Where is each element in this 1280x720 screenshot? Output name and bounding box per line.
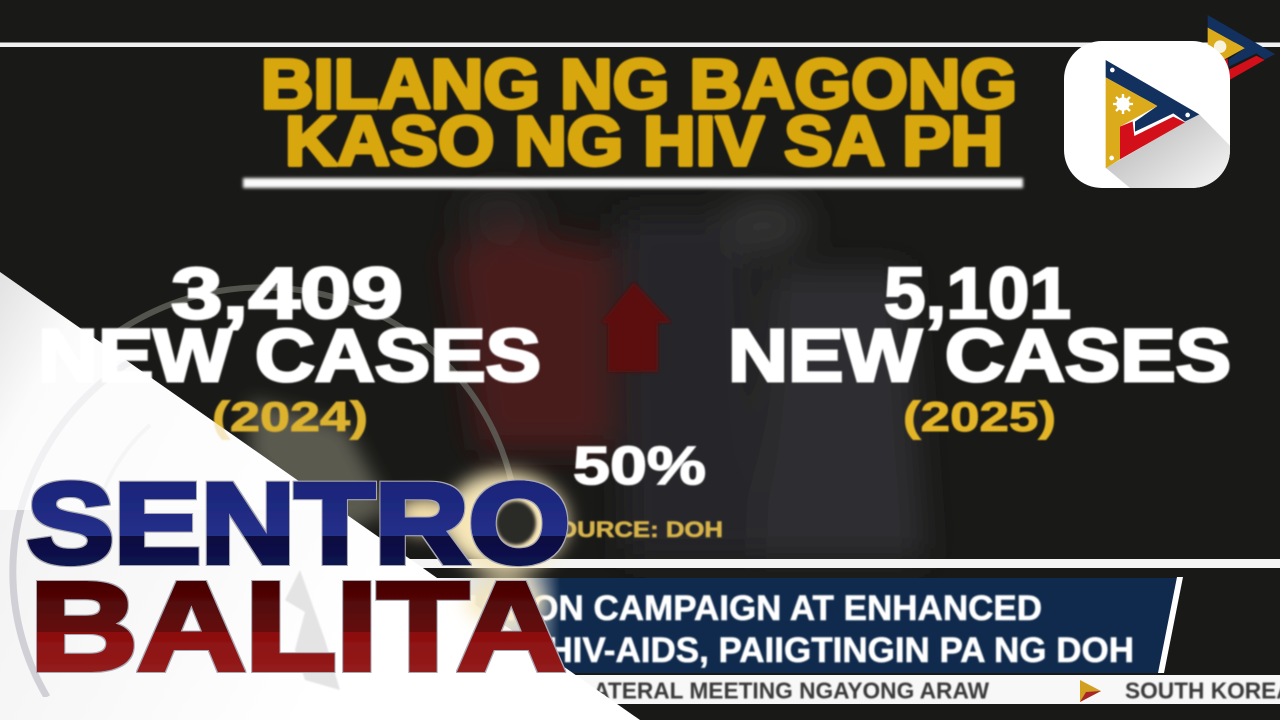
sentro balita white wedge (0, 272, 640, 720)
up arrow (601, 282, 672, 372)
left stat: 2024 new cases: NEW CASES (38, 314, 541, 397)
title: KASO NG HIV SA PH (285, 102, 1003, 180)
logo stars (1109, 68, 1190, 160)
left stat: 2024 new cases: 3,409 (171, 254, 403, 334)
sentro balita logo (27, 460, 570, 696)
right stat: 2025 new cases: NEW CASES (728, 314, 1231, 397)
headline text (330, 589, 1134, 670)
wedge globe arc (9, 362, 132, 697)
balita wordmark: BALITA (30, 558, 565, 696)
logo red chevron (1120, 117, 1185, 159)
wedge inner arc (100, 425, 150, 500)
wedge translucent veil (0, 272, 340, 510)
right stat: 2025 new cases: (2025) (903, 393, 1056, 440)
left stat: 2024 new cases: (2024) (212, 393, 368, 440)
logo sun (1113, 94, 1133, 114)
news ticker (364, 675, 1280, 704)
source: SOURCE: DOH (540, 517, 723, 542)
ticker text: PAGDARAOS NG BILATERAL MEETING NGAYONG ARAW (364, 678, 990, 704)
sentro wordmark: SENTRO (27, 460, 570, 588)
logo drop shadow (1106, 114, 1240, 188)
counter of the O (496, 501, 536, 545)
icon: small corner logo (1208, 15, 1275, 93)
background globe (100, 287, 515, 540)
logo blue chevron (1106, 60, 1199, 132)
percent increase: 50% (573, 436, 706, 496)
icon: ticker play arrow (1080, 680, 1101, 702)
headline text: TESTING VS HIV-AIDS, PAIIGTINGIN PA NG DOH (330, 631, 1134, 670)
title (261, 45, 1017, 180)
title underline (243, 178, 1023, 188)
logo glow (395, 472, 567, 626)
icon: main app logo (1064, 41, 1240, 188)
headline text: INFORMATION CAMPAIGN AT ENHANCED (339, 589, 1042, 628)
title: BILANG NG BAGONG (261, 45, 1017, 123)
logo gold triangle (1106, 77, 1157, 168)
top rule (0, 42, 1280, 47)
headline fade (420, 578, 560, 674)
ticker fade (420, 675, 585, 704)
left stat: 2024 new cases (38, 254, 541, 440)
lower rule (0, 559, 1280, 568)
wedge continent shapes (285, 570, 340, 690)
right stat: 2025 new cases (728, 254, 1231, 440)
right stat: 2025 new cases: 5,101 (884, 254, 1071, 334)
headline bar (330, 577, 1183, 673)
